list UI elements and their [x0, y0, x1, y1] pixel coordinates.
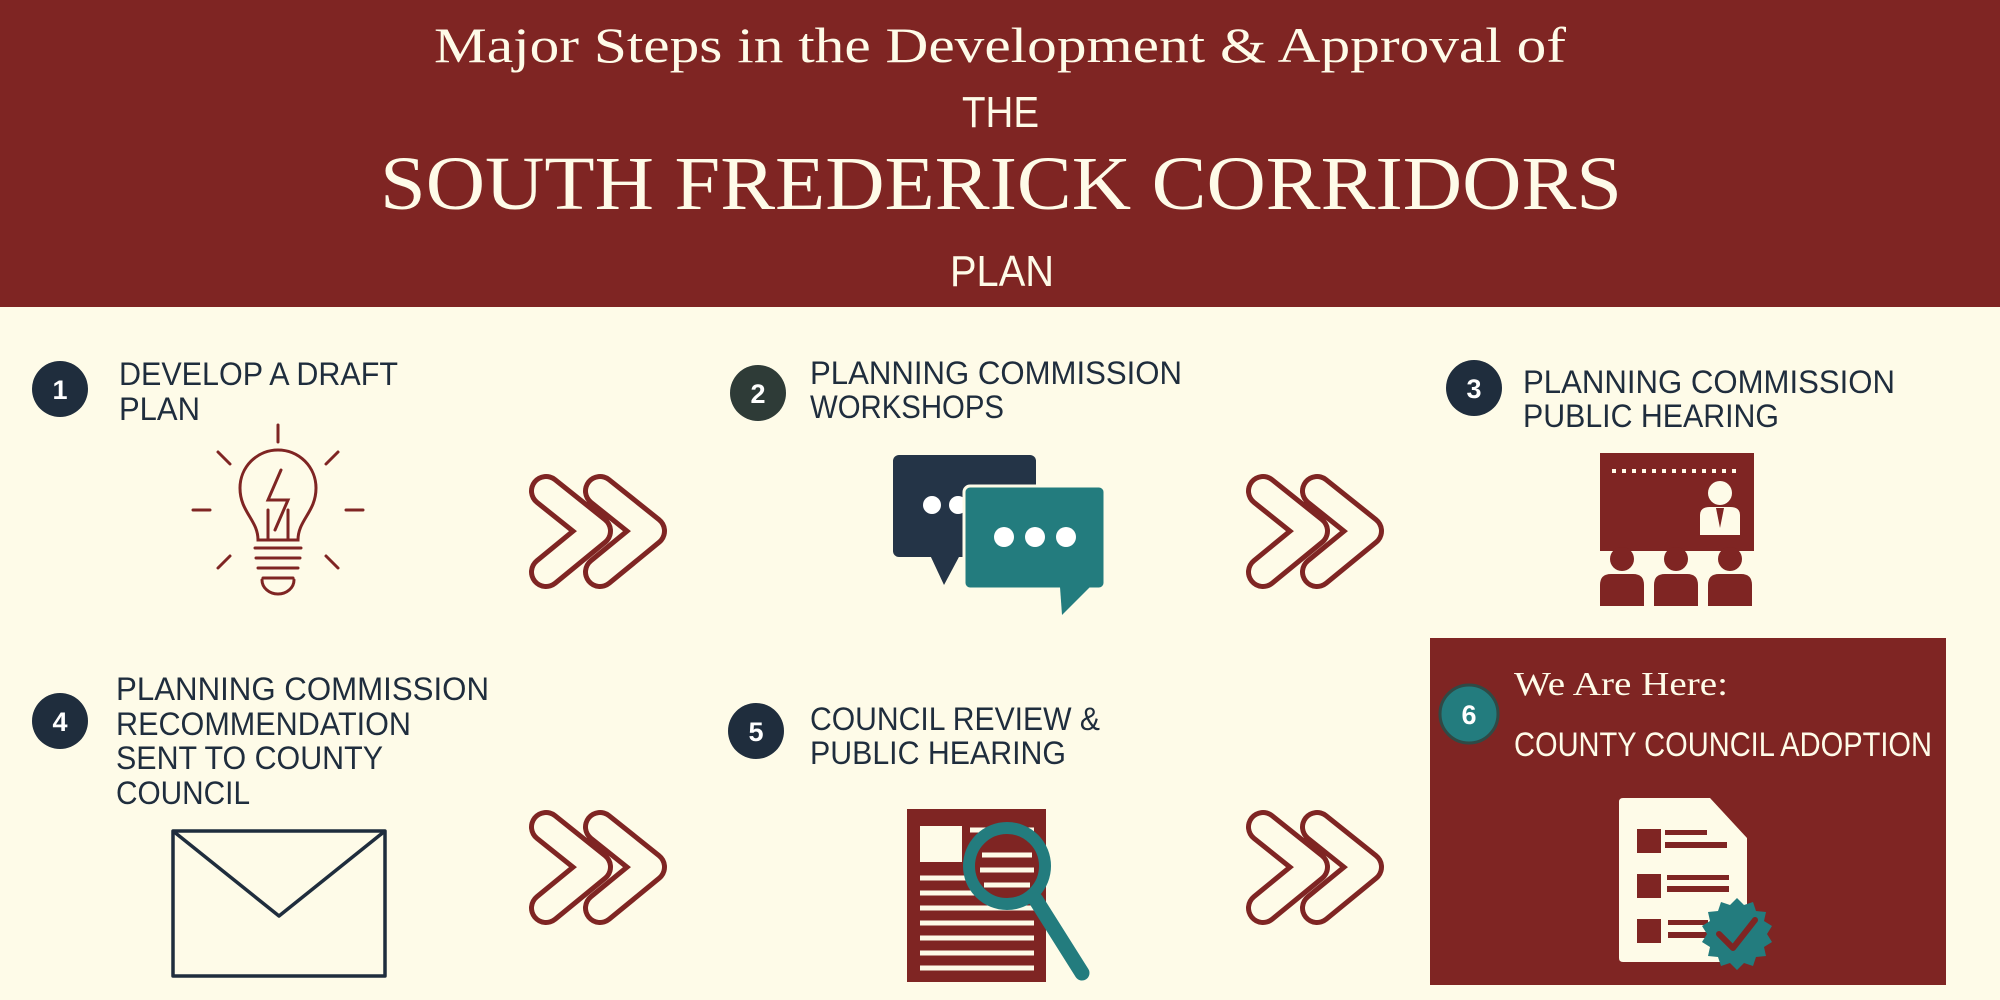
step 4: COUNCIL	[116, 775, 250, 811]
step 5: COUNCIL REVIEW &	[810, 701, 1100, 737]
step 1: DEVELOP A DRAFT	[119, 356, 398, 392]
step 6 title: COUNTY COUNCIL ADOPTION	[1514, 726, 1932, 764]
step 6 number badge: 6	[1461, 700, 1477, 730]
step 4: 4	[52, 707, 68, 737]
title: THE: THE	[962, 88, 1039, 137]
icon: envelope	[173, 831, 385, 976]
icon: lightbulb	[193, 425, 363, 594]
step 3: PLANNING COMMISSION	[1523, 364, 1895, 400]
title line 1: Major Steps in the Development & Approval of	[434, 17, 1566, 73]
step 4	[32, 671, 489, 811]
icon: chat bubbles	[893, 455, 1105, 615]
step 2: PLANNING COMMISSION	[810, 355, 1182, 391]
title: main: SOUTH FREDERICK CORRIDORS	[380, 142, 1622, 226]
arrow: chevrons 4-5	[546, 827, 650, 908]
step 4: RECOMMENDATION	[116, 706, 411, 742]
icon: document with magnifier	[907, 809, 1082, 982]
step 3: 3	[1466, 374, 1482, 404]
step 5: PUBLIC HEARING	[810, 735, 1066, 771]
we are here label: We Are Here:	[1514, 666, 1728, 703]
step 4: SENT TO COUNTY	[116, 740, 383, 776]
icon: public hearing presentation	[1600, 453, 1754, 606]
step 2: 2	[750, 379, 766, 409]
step 2: WORKSHOPS	[810, 389, 1004, 425]
step 6 number badge	[1440, 685, 1498, 743]
step 1	[32, 356, 398, 427]
arrow: chevrons 5-6	[1263, 827, 1367, 908]
header banner	[0, 0, 2000, 307]
step 1: PLAN	[119, 391, 200, 427]
step 3	[1446, 360, 1895, 434]
icon: checklist with badge	[1619, 798, 1772, 970]
step 5: 5	[748, 717, 764, 747]
step 5	[728, 701, 1100, 771]
panel: step 6 we are here	[1430, 638, 1946, 985]
step 1: 1	[52, 375, 68, 405]
step 2	[730, 355, 1182, 425]
step 3: PUBLIC HEARING	[1523, 398, 1779, 434]
step 4: PLANNING COMMISSION	[116, 671, 489, 707]
arrow: chevrons 2-3	[1263, 491, 1367, 572]
arrow: chevrons 1-2	[546, 491, 650, 572]
title: PLAN: PLAN	[950, 247, 1054, 296]
